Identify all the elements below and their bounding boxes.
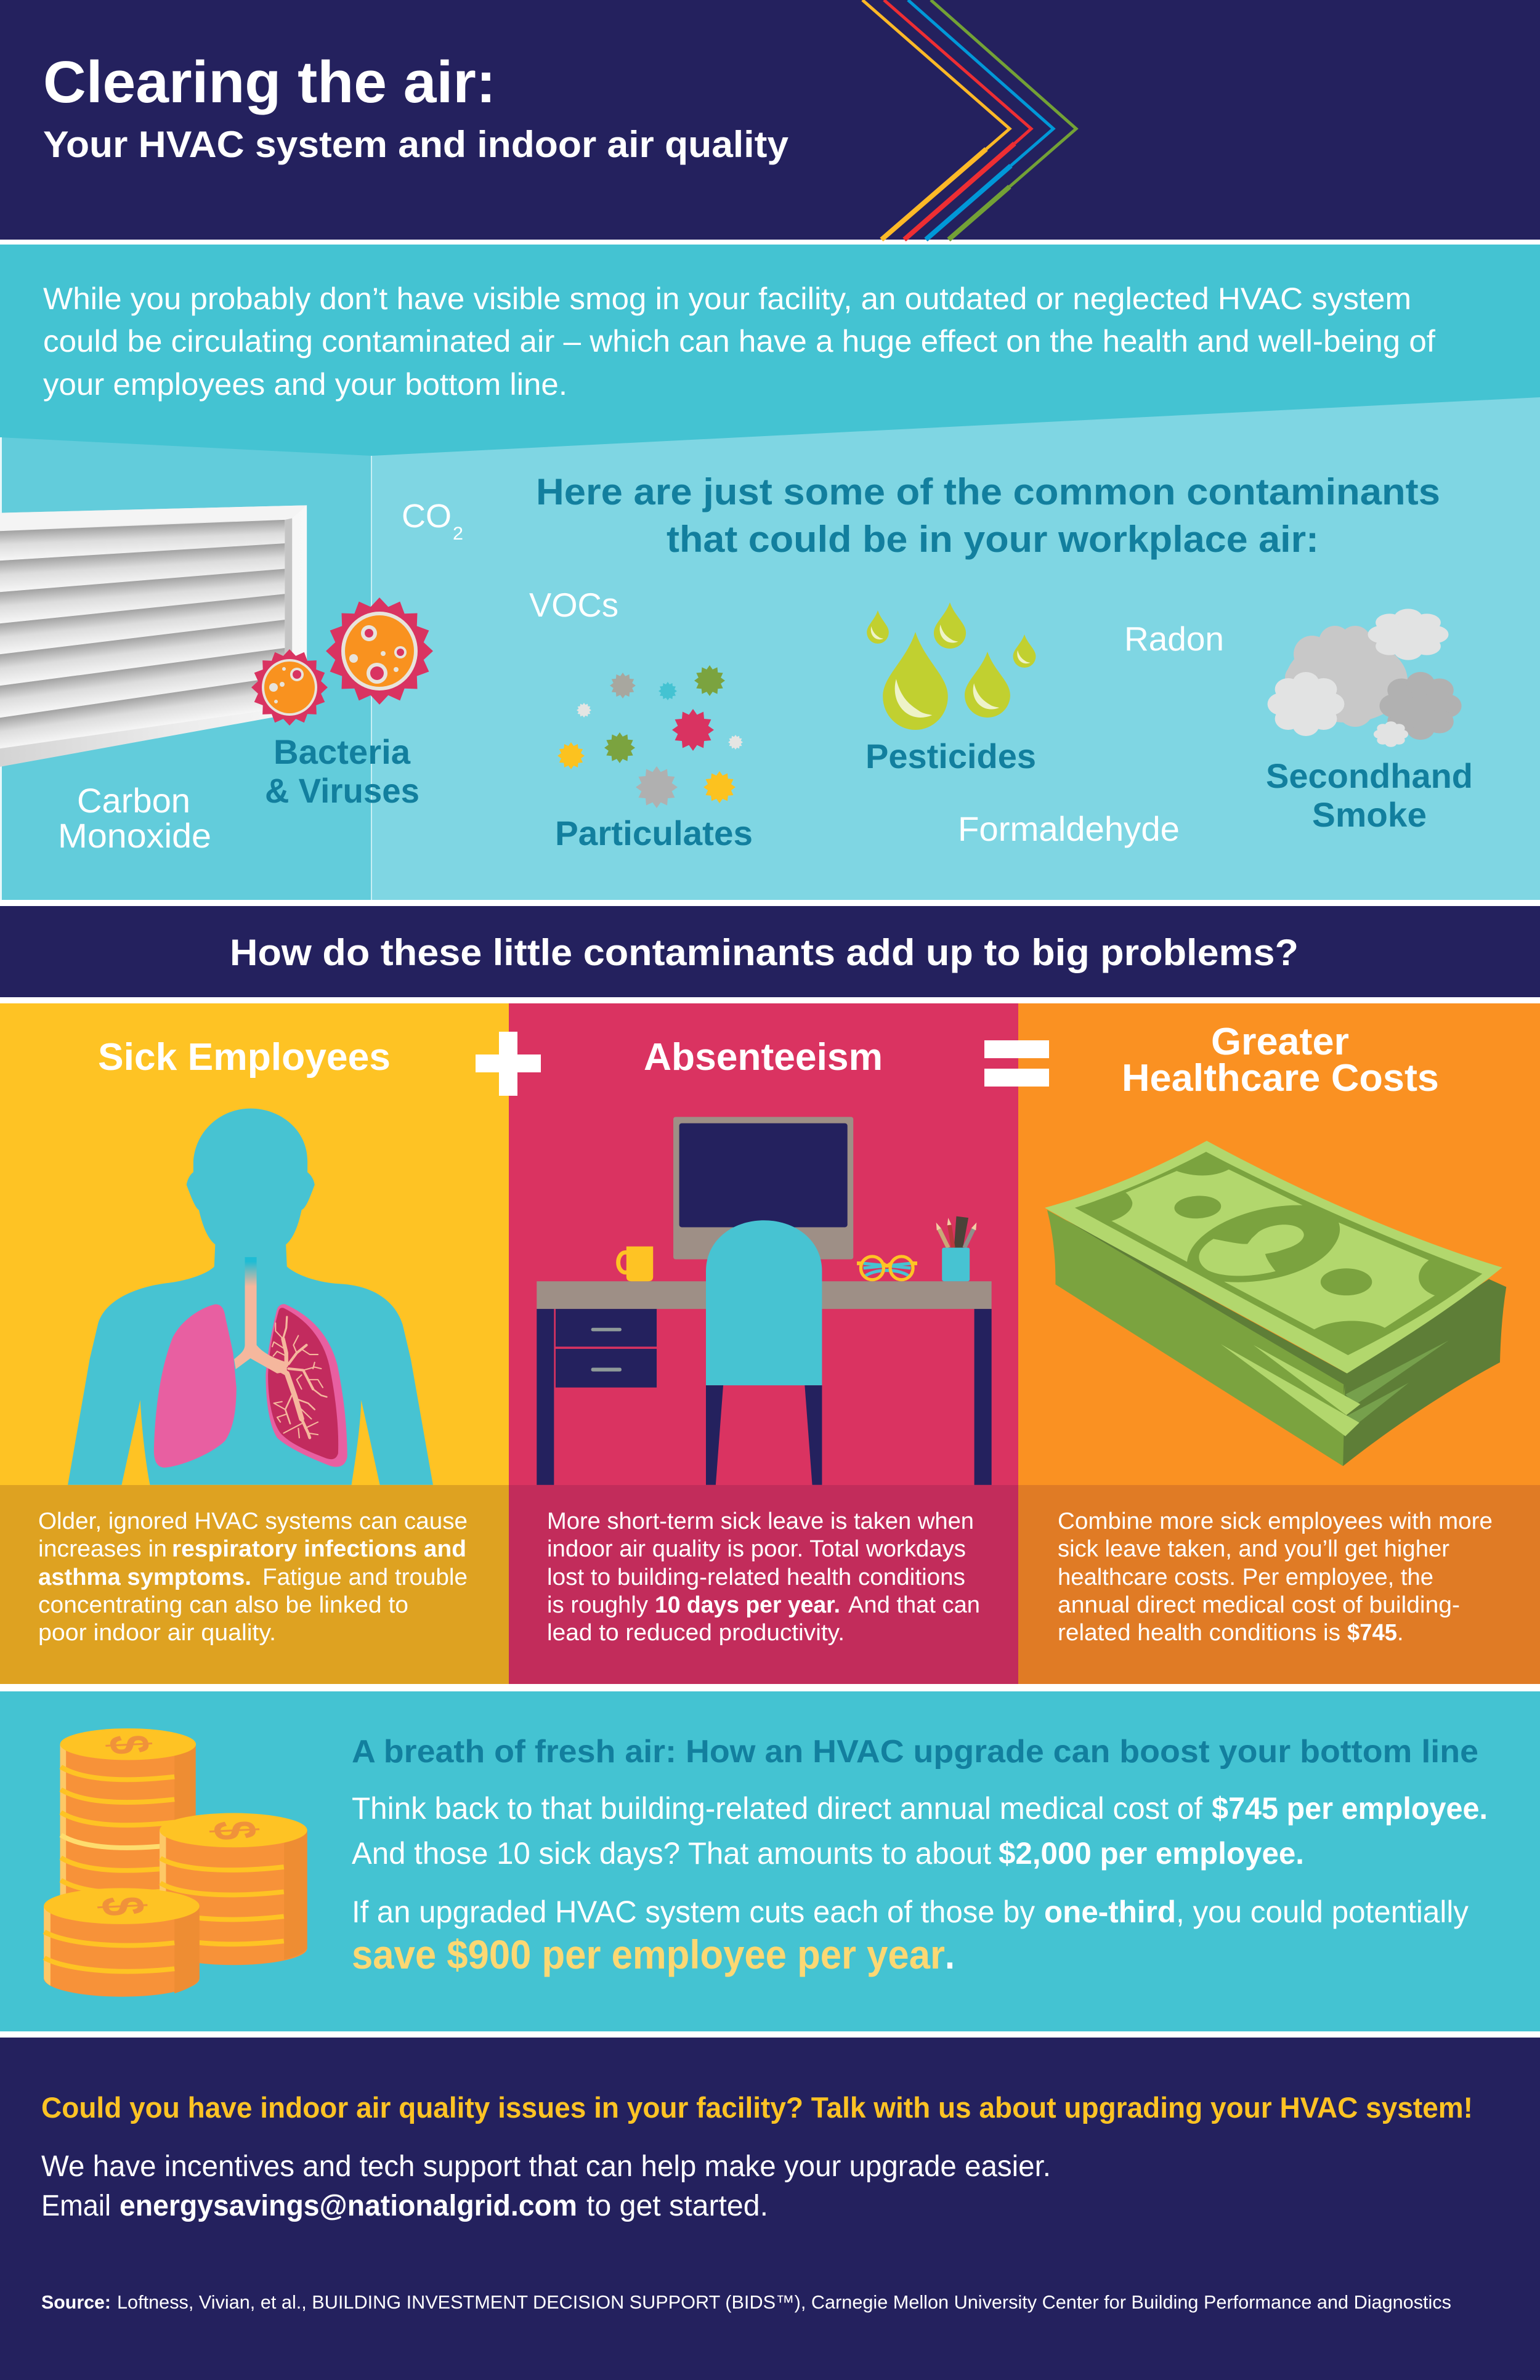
label: Pesticides: Pesticides — [865, 737, 1036, 775]
heading: sick employees: Sick Employees — [98, 1036, 391, 1079]
heading: absenteeism: Absenteeism — [644, 1036, 883, 1079]
banner heading: How do these little contaminants add up to big problems? — [230, 932, 1299, 973]
text: absenteeism: And that can — [848, 1592, 980, 1618]
contact text: We have incentives and tech support that can help make your upgrade easier. — [41, 2150, 1051, 2183]
text: sick employees: asthma symptoms. — [38, 1564, 251, 1590]
text: savings calculation: $745 per employee. — [1212, 1791, 1488, 1826]
coin stack: medium: $ — [199, 1819, 270, 1841]
text: healthcare costs: . — [1397, 1620, 1404, 1646]
text: absenteeism: is roughly — [547, 1592, 648, 1618]
label: Bacteria & Viruses: & Viruses — [265, 771, 419, 810]
contact text: to get started. — [586, 2190, 768, 2222]
icon: coin stacks — [44, 1728, 307, 1997]
text: healthcare costs: Combine more sick employees with more — [1058, 1508, 1493, 1534]
intro text: your employees and your bottom line. — [43, 367, 567, 402]
panel: absenteeism — [509, 1003, 1018, 1684]
label: Carbon Monoxide: Carbon — [77, 781, 190, 820]
heading: contaminants: Here are just some of the common contaminants — [536, 471, 1440, 512]
label: Carbon Monoxide — [58, 781, 211, 855]
icon: office desk — [537, 1117, 992, 1485]
panel: healthcare costs — [1018, 1003, 1540, 1684]
coin stack: tall — [60, 1728, 196, 1903]
heading: greater healthcare costs — [1122, 1021, 1439, 1099]
icon: small bacterium — [251, 649, 328, 726]
text: healthcare costs: related health conditions is — [1058, 1620, 1340, 1646]
contact text: Email — [41, 2190, 111, 2222]
text: sick employees: poor indoor air quality. — [38, 1620, 276, 1646]
text: savings calculation: one-third — [1044, 1895, 1176, 1929]
panel: header — [0, 0, 1540, 240]
icon: equals sign — [984, 1040, 1049, 1087]
call to action: Could you have indoor air quality issues in your facility? Talk with us about upgrading your HVAC system! — [41, 2091, 1473, 2124]
label: Carbon Monoxide: Monoxide — [58, 816, 211, 855]
source: Source: — [41, 2291, 111, 2313]
label: Secondhand Smoke: Smoke — [1312, 795, 1427, 834]
panel: footer — [0, 2038, 1540, 2380]
text: healthcare costs — [1058, 1508, 1493, 1646]
panel: introduction — [0, 245, 1540, 503]
callout: save $900: . — [945, 1932, 955, 1977]
text: sick employees: concentrating can also be linked to — [38, 1592, 408, 1618]
intro text — [43, 281, 1435, 402]
text: savings calculation: $2,000 per employee. — [999, 1836, 1304, 1871]
text: sick employees: increases in — [38, 1536, 167, 1562]
icon: person with lungs — [68, 1109, 433, 1485]
text: absenteeism: 10 days per year. — [655, 1592, 840, 1618]
heading: breath of fresh air: A breath of fresh air: How an HVAC upgrade can boost your bottom line — [352, 1734, 1478, 1770]
coin stack: short — [44, 1888, 200, 1997]
panel: question banner — [0, 906, 1540, 997]
callout: save $900: save $900 per employee per year — [352, 1932, 945, 1977]
label: Formaldehyde: Formaldehyde — [958, 809, 1180, 848]
label: CO2: CO — [402, 498, 452, 535]
intro text: While you probably don’t have visible smog in your facility, an outdated or neglected HVAC system — [43, 281, 1411, 316]
contact text — [41, 2150, 1051, 2222]
text: absenteeism: More short-term sick leave is taken when — [547, 1508, 974, 1534]
text: absenteeism — [547, 1508, 980, 1646]
subtitle: Your HVAC system and indoor air quality — [43, 124, 789, 165]
panel: contaminants room — [0, 397, 1540, 900]
label: Secondhand Smoke — [1266, 756, 1473, 834]
label: CO2: 2 — [453, 524, 463, 544]
icon: large bacterium — [326, 597, 433, 705]
intro text: could be circulating contaminated air – which can have a huge effect on the health and well-being of — [43, 324, 1435, 358]
label: Bacteria & Viruses: Bacteria — [274, 732, 411, 771]
text: sick employees: Older, ignored HVAC systems can cause — [38, 1508, 468, 1534]
text: healthcare costs: annual direct medical cost of building- — [1058, 1592, 1460, 1618]
text: savings calculation: Think back to that building-related direct annual medical cost of — [352, 1791, 1202, 1826]
icon: air vent — [0, 505, 307, 767]
text: savings calculation: , you could potentially — [1176, 1895, 1469, 1929]
text: sick employees: Fatigue and trouble — [262, 1564, 468, 1590]
text: healthcare costs: sick leave taken, and you’ll get higher — [1058, 1536, 1449, 1562]
text: absenteeism: lost to building-related health conditions — [547, 1564, 965, 1590]
coin stack: medium — [160, 1813, 307, 1965]
source: Loftness, Vivian, et al., BUILDING INVESTMENT DECISION SUPPORT (BIDS™), Carnegie Mellon University Center for Building Performance and Diagnostics — [117, 2291, 1451, 2313]
text: savings calculation — [352, 1791, 1488, 1929]
panel: savings — [0, 1691, 1540, 2031]
chevron lines — [862, 0, 1076, 240]
label: Bacteria & Viruses — [265, 732, 419, 810]
text: savings calculation: If an upgraded HVAC system cuts each of those by — [352, 1895, 1035, 1929]
heading: greater healthcare costs: Greater — [1211, 1021, 1349, 1063]
heading: contaminants — [536, 471, 1440, 560]
label: VOCs: VOCs — [529, 586, 618, 624]
text: sick employees: respiratory infections and — [172, 1536, 466, 1562]
heading: contaminants: that could be in your workplace air: — [667, 519, 1319, 560]
icon: smoke clouds — [1268, 609, 1462, 747]
icon: plus sign — [476, 1032, 541, 1096]
title: Clearing the air: — [43, 49, 496, 115]
label: CO2 — [402, 498, 463, 544]
panel: sick employees — [0, 1003, 509, 1684]
label: Secondhand Smoke: Secondhand — [1266, 756, 1473, 795]
text: absenteeism: lead to reduced productivity. — [547, 1620, 845, 1646]
text: savings calculation: And those 10 sick days? That amounts to about — [352, 1836, 991, 1871]
label: Radon: Radon — [1124, 620, 1224, 658]
text: healthcare costs: $745 — [1347, 1620, 1397, 1646]
icon: particulates — [557, 665, 743, 808]
label: Particulates: Particulates — [555, 814, 753, 852]
icon: stack of money — [1045, 1141, 1506, 1466]
text: sick employees — [38, 1508, 468, 1646]
coin stack: tall: $ — [95, 1733, 162, 1755]
heading: greater healthcare costs: Healthcare Costs — [1122, 1057, 1439, 1099]
text: healthcare costs: healthcare costs. Per employee, the — [1058, 1564, 1433, 1590]
coin stack: short: $ — [87, 1895, 158, 1917]
contact text: energysavings@nationalgrid.com — [120, 2190, 577, 2222]
icon: pesticide drops — [867, 602, 1035, 730]
text: absenteeism: indoor air quality is poor. Total workdays — [547, 1536, 966, 1562]
